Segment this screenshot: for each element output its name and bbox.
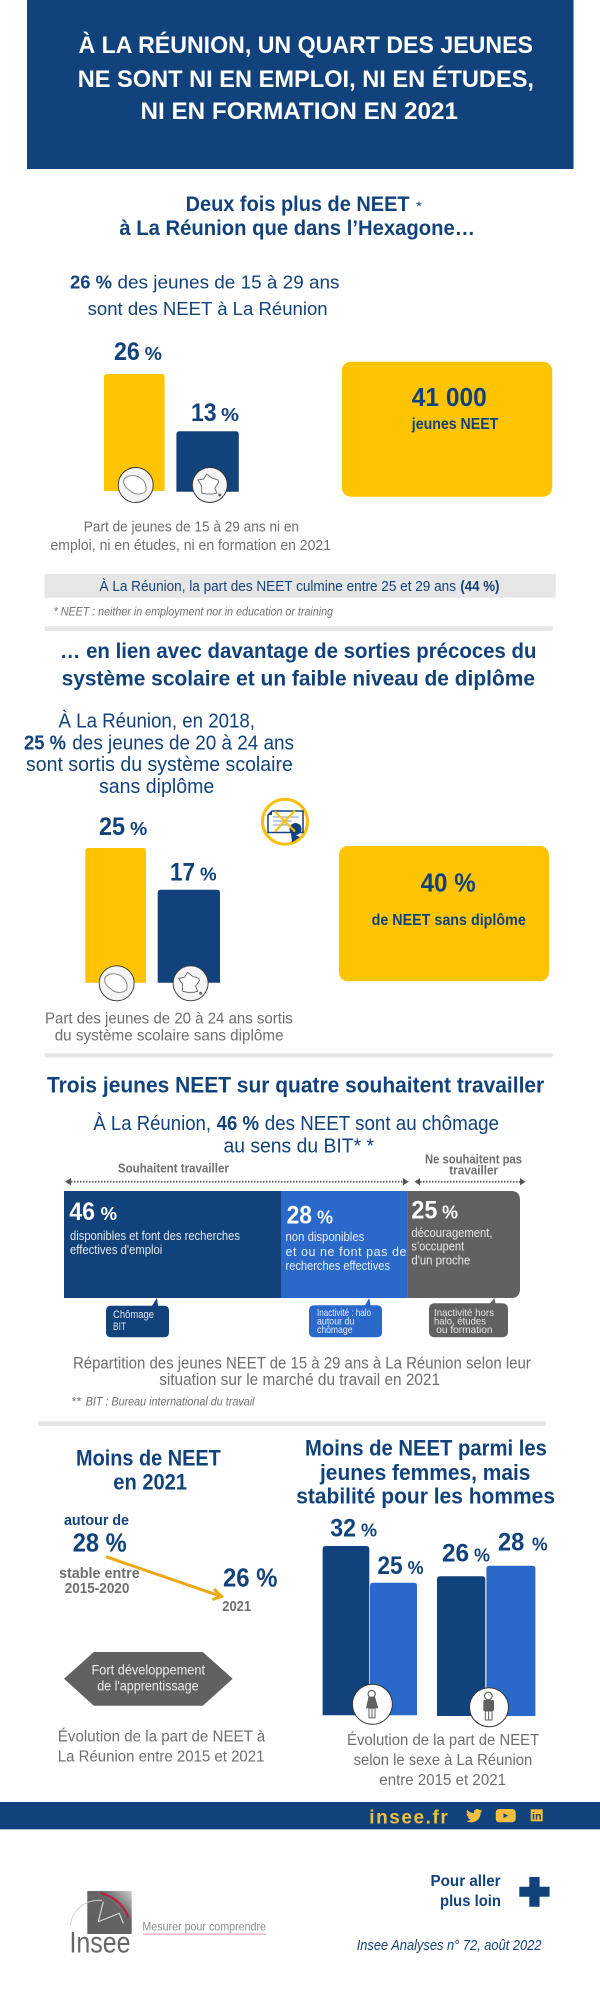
start value: 28 percent: [59, 1513, 140, 1597]
callout: inactivity halo: Inactivité : halo: [317, 1307, 371, 1319]
text: 26 percent of youth: 26 %: [70, 272, 112, 293]
bar chart: men: %: [532, 1534, 548, 1555]
caption: evolution: [58, 1727, 265, 1766]
callout: 40 percent without diploma: de NEET sans diplôme: [372, 912, 526, 929]
bar chart: Réunion vs Hexagone: %: [221, 404, 239, 425]
segment: 46 percent unemployed: disponibles et font des recherches: [70, 1229, 240, 1243]
start value: 28 percent: 28 %: [73, 1528, 127, 1558]
caption: evolution by sex: entre 2015 et 2021: [379, 1772, 506, 1789]
segment: 25 percent not wanting work: [408, 1191, 520, 1298]
panel: labour market situation: [47, 1072, 545, 1409]
callout: inactivity outside halo: Inactivité hors: [434, 1307, 494, 1319]
icon: France map: [173, 966, 208, 1001]
icon: woman: [352, 1684, 392, 1724]
heading: twice as many NEET: *: [416, 198, 423, 214]
bar chart: men: %: [474, 1545, 490, 1566]
caption: school leavers: du système scolaire sans diplôme: [55, 1028, 284, 1045]
start value: 28 percent: autour de: [64, 1513, 129, 1529]
callout: inactivity halo: chômage: [317, 1324, 353, 1336]
callout: 40 percent without diploma: 40 %: [421, 870, 476, 898]
segment: 46 percent unemployed: 46: [69, 1198, 95, 1226]
logo: Insee: Insee: [70, 1926, 130, 1960]
text: 26 percent of youth: des jeunes de 15 à 29 ans: [118, 272, 340, 293]
heading: early exits: [60, 640, 536, 691]
bar chart: men: 28: [498, 1529, 524, 1557]
text: 46 percent unemployed: des NEET sont au chômage: [265, 1113, 499, 1135]
caption: evolution by sex: Évolution de la part de NEET: [347, 1730, 539, 1749]
segment: 25 percent not wanting work: d'un proche: [411, 1254, 470, 1268]
callout: 41 000 young NEET: jeunes NEET: [411, 416, 499, 433]
bar chart: Réunion vs Hexagone: 26: [114, 338, 140, 366]
segment: 25 percent not wanting work: %: [442, 1201, 458, 1222]
text: 25 percent left school: sans diplôme: [99, 776, 214, 798]
icon: France map: [192, 468, 227, 502]
callout: BIT unemployment: Chômage: [113, 1309, 154, 1321]
heading: early exits: système scolaire et un faible niveau de diplôme: [62, 668, 535, 691]
end value: 26 percent: 26 %: [223, 1563, 278, 1593]
text: 46 percent unemployed: À La Réunion,: [93, 1112, 211, 1135]
bar chart: women: 25: [377, 1552, 403, 1580]
icon: linkedin: in: [532, 1811, 542, 1822]
source reference: Insee Analyses n° 72, août 2022: [357, 1937, 542, 1954]
bar chart: Réunion vs Hexagone: %: [145, 343, 162, 364]
text: 25 percent left school: sont sortis du système scolaire: [26, 754, 293, 776]
heading: fewer NEET in 2021: [76, 1446, 221, 1495]
caption: share of young NEET: Part de jeunes de 15 à 29 ans ni en: [84, 520, 299, 536]
callout: inactivity outside halo: [429, 1298, 508, 1337]
caption: school leavers: Part des jeunes de 20 à 24 ans sortis: [45, 1010, 293, 1027]
bar chart: Réunion vs Hexagone: 13: [191, 399, 217, 427]
icon: plus: [519, 1877, 550, 1907]
callout: inactivity halo: autour du: [317, 1316, 355, 1328]
icon: Réunion map: [99, 966, 134, 1001]
hexagon: apprenticeship growth: [64, 1652, 233, 1706]
segment: 25 percent not wanting work: s'occupent: [411, 1240, 465, 1254]
start value: 28 percent: stable entre: [59, 1566, 140, 1582]
heading: twice as many NEET: Deux fois plus de NEET: [186, 193, 410, 216]
footnote: NEET definition: * NEET : neither in employment nor in education or training: [54, 607, 334, 619]
heading: fewer young women: stabilité pour les hommes: [296, 1484, 555, 1509]
caption: breakdown of NEET: situation sur le marché du travail en 2021: [159, 1371, 440, 1389]
bar chart: without diploma: %: [200, 864, 217, 885]
caption: breakdown of NEET: Répartition des jeunes NEET de 15 à 29 ans à La Réunion selon leur: [73, 1354, 531, 1372]
callout: BIT unemployment: BIT: [113, 1321, 126, 1333]
caption: evolution: La Réunion entre 2015 et 2021: [58, 1749, 264, 1766]
text: 25 percent left school: 25 %: [24, 732, 66, 754]
start value: 28 percent: 2015-2020: [65, 1581, 129, 1597]
callout: inactivity outside halo: halo, études: [434, 1316, 486, 1328]
logo: Insee: [70, 1891, 266, 1960]
arrow: do not want span: [414, 1178, 525, 1185]
bar chart: without diploma: %: [130, 818, 147, 839]
footer band: [0, 1802, 600, 1829]
segment: 28 percent inactive halo: %: [317, 1206, 333, 1227]
label: do not want to work: Ne souhaitent pas: [425, 1153, 522, 1167]
text: 46 percent unemployed: [93, 1112, 499, 1157]
bar chart: men: [437, 1529, 548, 1727]
text: 25 percent left school: des jeunes de 20 à 24 ans: [72, 732, 294, 754]
heading: early exits: … en lien avec davantage de sorties précoces du: [60, 640, 536, 663]
title banner: NE SONT NI EN EMPLOI, NI EN ÉTUDES,: [78, 65, 534, 93]
segment: 25 percent not wanting work: 25: [411, 1196, 437, 1224]
caption: evolution by sex: selon le sexe à La Réunion: [354, 1752, 532, 1769]
heading: fewer young women: [296, 1436, 555, 1509]
link: further reading: [430, 1873, 550, 1910]
segment: 28 percent inactive halo: et ou ne font pas de: [286, 1245, 406, 1259]
icon: youtube: [496, 1809, 516, 1822]
callout: 41 000 young NEET: 41 000: [412, 384, 487, 412]
icon: crossed-out diploma: [262, 799, 308, 844]
title banner: [27, 0, 574, 169]
end value: 26 percent: [222, 1563, 278, 1615]
heading: three in four want to work: Trois jeunes NEET sur quatre souhaitent travailler: [47, 1072, 545, 1097]
caption: share of young NEET: emploi, ni en études, ni en formation en 2021: [50, 538, 331, 554]
hexagon: apprenticeship growth: Fort développement: [92, 1662, 205, 1678]
arrow: want to work span: [65, 1178, 409, 1185]
bar chart: women: %: [408, 1557, 424, 1578]
title banner: NI EN FORMATION EN 2021: [140, 98, 458, 125]
panel: early school leaving: [24, 640, 549, 1045]
segment: 46 percent unemployed: [64, 1191, 281, 1298]
callout: inactivity outside halo: ou formation: [436, 1324, 493, 1336]
label: want to work: Souhaitent travailler: [118, 1162, 229, 1176]
highlight band: peak at 25-29: À La Réunion, la part des NEET culmine entre 25 et 29 ans: [100, 578, 456, 595]
callout: BIT unemployment: [106, 1298, 169, 1337]
bar chart: without diploma: [85, 813, 220, 1001]
segment: 28 percent inactive halo: recherches effectives: [286, 1259, 390, 1273]
caption: breakdown of NEET: [73, 1354, 531, 1389]
heading: fewer young women: jeunes femmes, mais: [319, 1460, 530, 1485]
segment: 28 percent inactive halo: [281, 1191, 408, 1298]
arrow: decline: [106, 1557, 222, 1600]
panel: decline in 2021: [58, 1446, 277, 1766]
callout: 41 000 young NEET: [342, 362, 552, 497]
link: further reading: plus loin: [440, 1893, 501, 1910]
bar chart: Réunion vs Hexagone: [104, 338, 239, 502]
bar chart: without diploma: 25: [99, 813, 125, 841]
bar chart: women: %: [361, 1520, 377, 1541]
segment: 25 percent not wanting work: découragement,: [411, 1226, 492, 1240]
site link: insee.fr: [369, 1807, 448, 1828]
icon: man: [470, 1688, 508, 1727]
footnote: BIT definition: **: [71, 1397, 82, 1409]
link: further reading: Pour aller: [430, 1873, 501, 1890]
label: do not want to work: [425, 1153, 522, 1178]
segment: 28 percent inactive halo: 28: [287, 1201, 312, 1229]
label: do not want to work: travailler: [449, 1164, 498, 1178]
caption: school leavers: [45, 1010, 293, 1045]
segment: 28 percent inactive halo: non disponibles: [286, 1230, 364, 1244]
heading: fewer NEET in 2021: Moins de NEET: [76, 1446, 221, 1471]
heading: fewer NEET in 2021: en 2021: [113, 1470, 187, 1495]
highlight band: peak at 25-29: [44, 574, 556, 598]
segment: 46 percent unemployed: %: [101, 1203, 117, 1224]
logo: Insee: Mesurer pour comprendre: [142, 1920, 266, 1934]
panel: by sex: [296, 1436, 555, 1789]
end value: 26 percent: 2021: [222, 1599, 251, 1615]
bar chart: men: 26: [442, 1540, 469, 1568]
heading: twice as many NEET: [119, 193, 475, 240]
heading: fewer young women: Moins de NEET parmi les: [305, 1436, 547, 1461]
title banner: À LA RÉUNION, UN QUART DES JEUNES: [78, 31, 533, 59]
caption: evolution by sex: [347, 1730, 539, 1789]
callout: inactivity halo: [309, 1298, 382, 1337]
icon: Réunion map: [118, 468, 153, 502]
hexagon: apprenticeship growth: de l'apprentissage: [97, 1678, 199, 1694]
caption: evolution: Évolution de la part de NEET à: [58, 1727, 265, 1746]
footnote: BIT definition: BIT : Bureau international du travail: [86, 1397, 255, 1409]
text: 25 percent left school: [24, 709, 294, 798]
bar chart: women: [323, 1515, 424, 1724]
icon: twitter: [466, 1809, 482, 1822]
callout: 40 percent without diploma: [339, 846, 549, 981]
bar chart: women: 32: [330, 1515, 356, 1543]
icon: linkedin: [531, 1809, 543, 1822]
text: 26 percent of youth: [70, 272, 340, 319]
segment: 46 percent unemployed: effectives d'emploi: [70, 1243, 162, 1257]
text: 26 percent of youth: sont des NEET à La Réunion: [88, 298, 328, 319]
panel: NEET comparison: [44, 193, 556, 619]
text: 25 percent left school: À La Réunion, en 2018,: [58, 709, 255, 732]
text: 46 percent unemployed: 46 %: [217, 1113, 259, 1135]
highlight band: peak at 25-29: (44 %): [460, 579, 500, 595]
text: 46 percent unemployed: au sens du BIT* *: [224, 1135, 374, 1157]
bar chart: without diploma: 17: [170, 859, 195, 887]
heading: twice as many NEET: à La Réunion que dans l’Hexagone…: [119, 217, 475, 240]
caption: share of young NEET: [50, 520, 331, 554]
